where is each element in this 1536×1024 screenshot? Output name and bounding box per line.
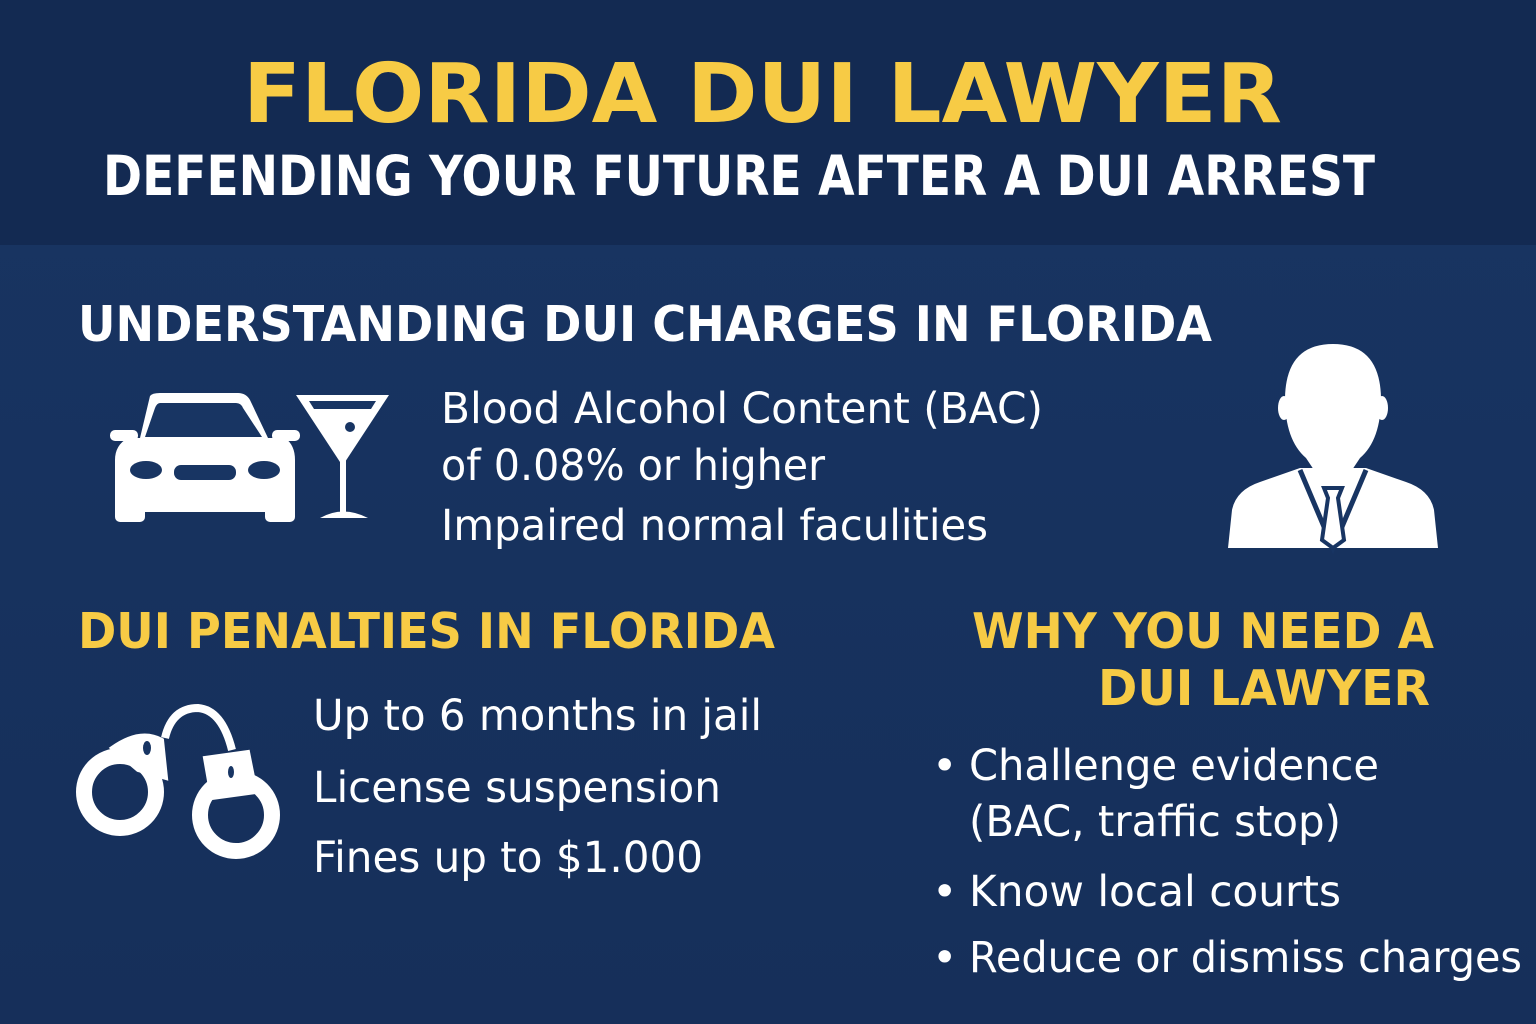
text block: BAC: Impaired normal faculities: [441, 501, 988, 551]
text block: BAC: of 0.08% or higher: [441, 441, 825, 491]
text block: penalties list: Fines up to $1.000: [313, 833, 703, 883]
heading: why you need a lawyer: [972, 603, 1434, 717]
bullet list: lawyer benefits: •: [932, 933, 957, 983]
bullet list: lawyer benefits: Challenge evidence: [969, 741, 1379, 791]
text block: BAC: [441, 384, 1043, 551]
heading: understanding: UNDERSTANDING DUI CHARGES IN FLORIDA: [78, 296, 1212, 353]
header band: [0, 0, 1536, 245]
bullet list: lawyer benefits: •: [932, 741, 957, 791]
heading: penalties: DUI PENALTIES IN FLORIDA: [78, 603, 775, 660]
bullet list: lawyer benefits: (BAC, traffic stop): [969, 797, 1341, 847]
bullet list: lawyer benefits: [932, 741, 1522, 983]
icon: car: [110, 393, 300, 522]
text block: penalties list: License suspension: [313, 763, 721, 813]
bullet list: lawyer benefits: •: [932, 867, 957, 917]
icon: handcuffs: [84, 708, 272, 851]
bullet list: lawyer benefits: Know local courts: [969, 867, 1341, 917]
icon: martini glass: [296, 395, 389, 518]
heading: why you need a lawyer: DUI LAWYER: [1098, 660, 1430, 717]
heading: why you need a lawyer: WHY YOU NEED A: [972, 603, 1434, 660]
text block: penalties list: [313, 691, 762, 883]
title: FLORIDA DUI LAWYER: [243, 47, 1282, 142]
text block: BAC: Blood Alcohol Content (BAC): [441, 384, 1043, 434]
icon: lawyer person: [1228, 344, 1438, 548]
bullet list: lawyer benefits: Reduce or dismiss charges: [969, 933, 1522, 983]
text block: penalties list: Up to 6 months in jail: [313, 691, 762, 741]
